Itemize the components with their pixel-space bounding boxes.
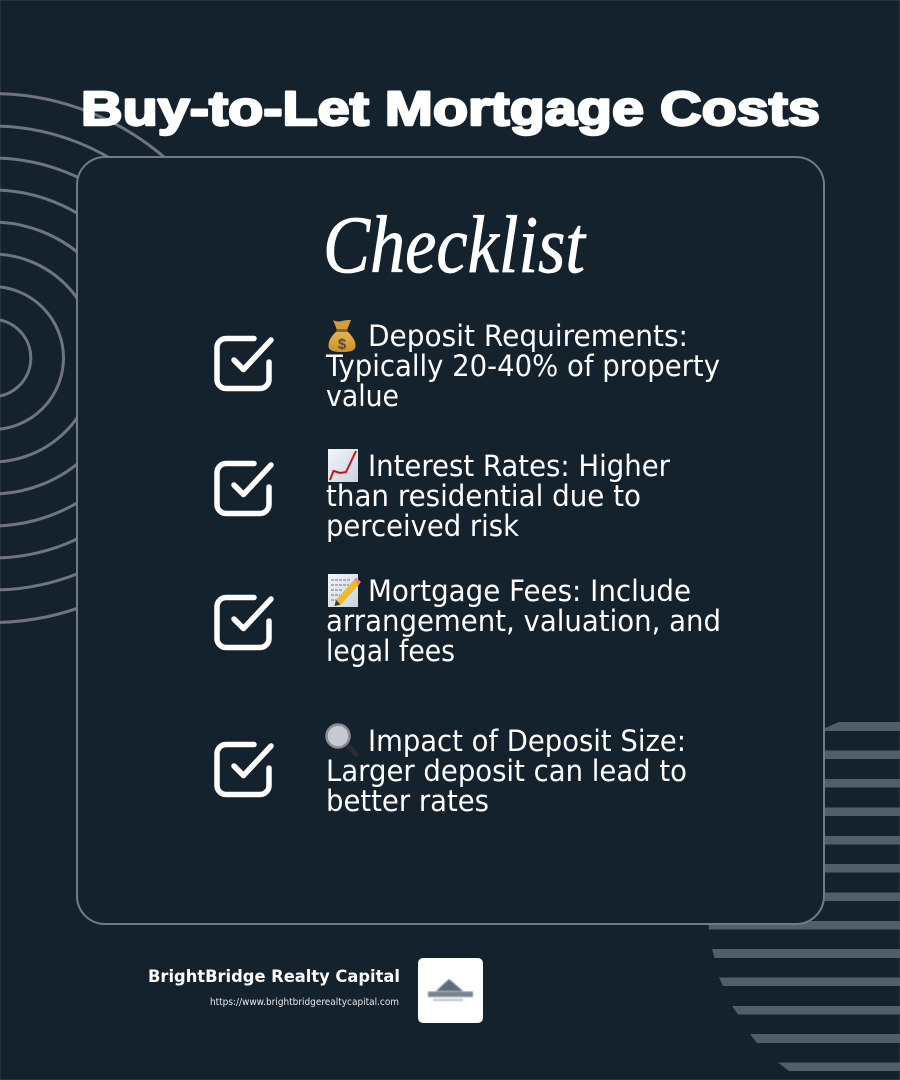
text: impact of deposit size	[326, 724, 687, 818]
text: deposit requirements	[325, 319, 720, 413]
footer company name: BrightBridge Realty Capital	[148, 967, 400, 987]
icon: magnifying glass	[326, 724, 356, 754]
icon: chart increasing	[328, 449, 358, 482]
icon: checkbox 2	[217, 464, 271, 514]
decorative concentric arcs	[0, 94, 256, 622]
text: deposit requirements: Deposit Requirements:	[368, 319, 688, 353]
text: mortgage fees: arrangement, valuation, and	[326, 604, 721, 638]
icon: checkbox 4	[217, 744, 271, 794]
icon: money bag	[328, 320, 356, 353]
text: impact of deposit size: Impact of Deposit Size:	[368, 724, 686, 758]
icon: money bag: $	[338, 336, 347, 353]
text: interest rates: perceived risk	[326, 509, 519, 543]
decorative striped shape	[708, 722, 900, 1071]
text: impact of deposit size: better rates	[326, 784, 489, 818]
checklist heading: Checklist	[323, 199, 587, 290]
icon: memo with pencil	[328, 574, 361, 607]
logo tile	[418, 958, 483, 1023]
footer url: https://www.brightbridgerealtycapital.com	[210, 997, 399, 1008]
text: impact of deposit size: Larger deposit can lead to	[326, 754, 687, 788]
text: mortgage fees: Mortgage Fees: Include	[368, 574, 691, 608]
title: Buy-to-Let Mortgage Costs	[81, 83, 820, 136]
item 3: mortgage fees	[217, 574, 721, 668]
text: deposit requirements: Typically 20-40% of property	[325, 349, 720, 383]
checklist panel	[77, 157, 824, 924]
text: mortgage fees: legal fees	[326, 634, 455, 668]
text: interest rates: than residential due to	[326, 479, 641, 513]
text: deposit requirements: value	[326, 379, 399, 413]
text: interest rates	[326, 449, 670, 543]
logo mark	[428, 979, 473, 1001]
text: mortgage fees	[326, 574, 721, 668]
text: interest rates: Interest Rates: Higher	[368, 449, 670, 483]
item 4: impact of deposit size	[217, 724, 687, 818]
item 1: deposit requirements	[217, 319, 720, 413]
item 2: interest rates	[217, 449, 670, 543]
icon: checkbox 3	[217, 598, 271, 648]
icon: checkbox 1	[217, 338, 271, 388]
